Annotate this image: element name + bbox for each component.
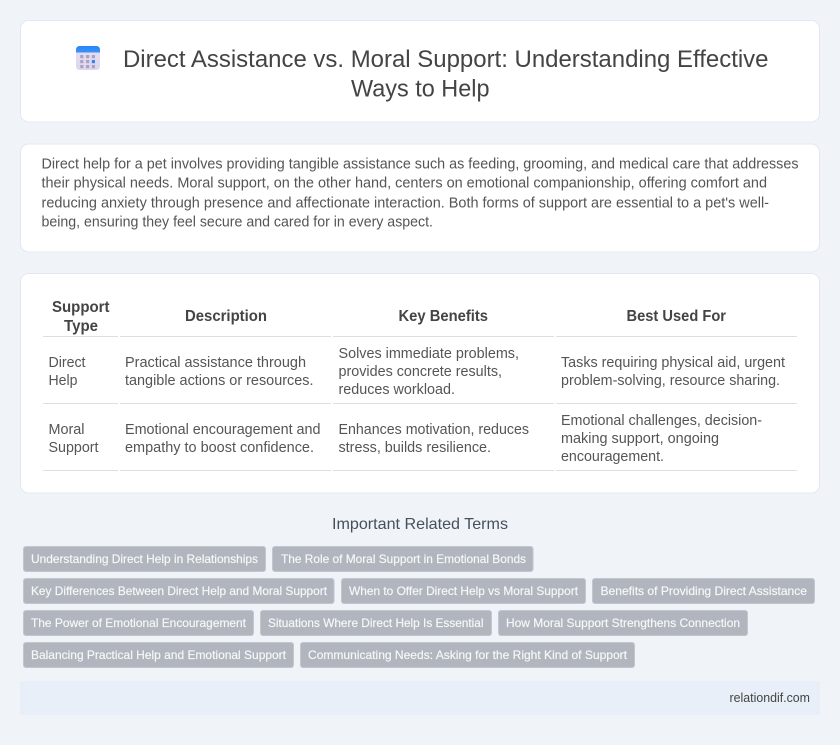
tag	[260, 610, 492, 636]
table row: moral support: Support	[48, 440, 98, 456]
tag: Balancing Practical Help and Emotional Support	[31, 648, 287, 662]
table header row: Type	[64, 318, 98, 335]
icon: calendar	[76, 46, 100, 70]
tag: The Power of Emotional Encouragement	[31, 616, 247, 630]
table row: moral support: making support, ongoing	[561, 431, 719, 447]
table row: moral support: Emotional challenges, decision-	[561, 413, 762, 429]
table header row: Description	[185, 308, 267, 325]
tag	[24, 610, 254, 636]
tag	[24, 642, 294, 668]
tag	[24, 578, 334, 604]
panel: intro paragraph	[20, 144, 820, 252]
table header row: Support	[52, 299, 110, 316]
table row: moral support: stress, builds resilience.	[338, 440, 491, 456]
table row: direct help: Tasks requiring physical aid, urgent	[561, 355, 785, 371]
table rules	[43, 336, 797, 471]
panel: comparison table	[20, 274, 820, 493]
tag	[24, 546, 266, 572]
intro text: Direct help for a pet involves providing tangible assistance such as feeding, grooming, and medical care that addresses	[42, 156, 798, 172]
related term tags	[24, 546, 814, 668]
table row: direct help: Practical assistance through	[125, 355, 306, 371]
footer source: relationdif.com	[730, 691, 810, 705]
tag: Benefits of Providing Direct Assistance	[600, 584, 807, 598]
table header row	[52, 299, 726, 335]
table row: direct help: Help	[48, 373, 78, 389]
table row: moral support: empathy to boost confidence.	[125, 440, 314, 456]
table row: direct help: reduces workload.	[338, 382, 455, 398]
table row: direct help: problem-solving, resource sharing.	[561, 373, 780, 389]
tag: Situations Where Direct Help Is Essential	[268, 616, 484, 630]
header panel	[20, 20, 820, 122]
table header row: Key Benefits	[398, 308, 488, 325]
tag: The Role of Moral Support in Emotional Bonds	[281, 552, 526, 566]
footer bar	[20, 681, 820, 715]
table row: moral support	[48, 413, 762, 465]
table row: direct help: tangible actions or resources.	[125, 373, 314, 389]
tag: Understanding Direct Help in Relationships	[31, 552, 258, 566]
tag	[498, 610, 748, 636]
table row: moral support: encouragement.	[561, 449, 664, 465]
tag	[592, 578, 814, 604]
tag: Communicating Needs: Asking for the Right Kind of Support	[308, 648, 628, 662]
tag	[300, 642, 634, 668]
tag: How Moral Support Strengthens Connection	[506, 616, 740, 630]
tag: Key Differences Between Direct Help and Moral Support	[31, 584, 328, 598]
table row: moral support: Emotional encouragement and	[125, 422, 320, 438]
intro text: their physical needs. Moral support, on the other hand, centers on emotional companionship, offering comfort and	[42, 176, 767, 192]
tag	[272, 546, 533, 572]
table row: direct help	[48, 346, 785, 398]
heading: important related terms: Important Related Terms	[332, 516, 508, 533]
intro text: being, ensuring they feel secure and cared for in every aspect.	[42, 215, 433, 231]
intro text: reducing anxiety through presence and affectionate interaction. Both forms of support are essential to a pet's well-	[42, 196, 769, 212]
title: Ways to Help	[351, 76, 490, 102]
tag: When to Offer Direct Help vs Moral Support	[349, 584, 579, 598]
table row: moral support: Moral	[48, 422, 84, 438]
table row: moral support: Enhances motivation, reduces	[338, 422, 529, 438]
table row: direct help: Direct	[48, 355, 86, 371]
table header row: Best Used For	[626, 308, 726, 325]
table row: direct help: provides concrete results,	[338, 364, 502, 380]
tag	[342, 578, 586, 604]
table row: direct help: Solves immediate problems,	[338, 346, 519, 362]
title: Direct Assistance vs. Moral Support: Understanding Effective	[123, 46, 768, 73]
